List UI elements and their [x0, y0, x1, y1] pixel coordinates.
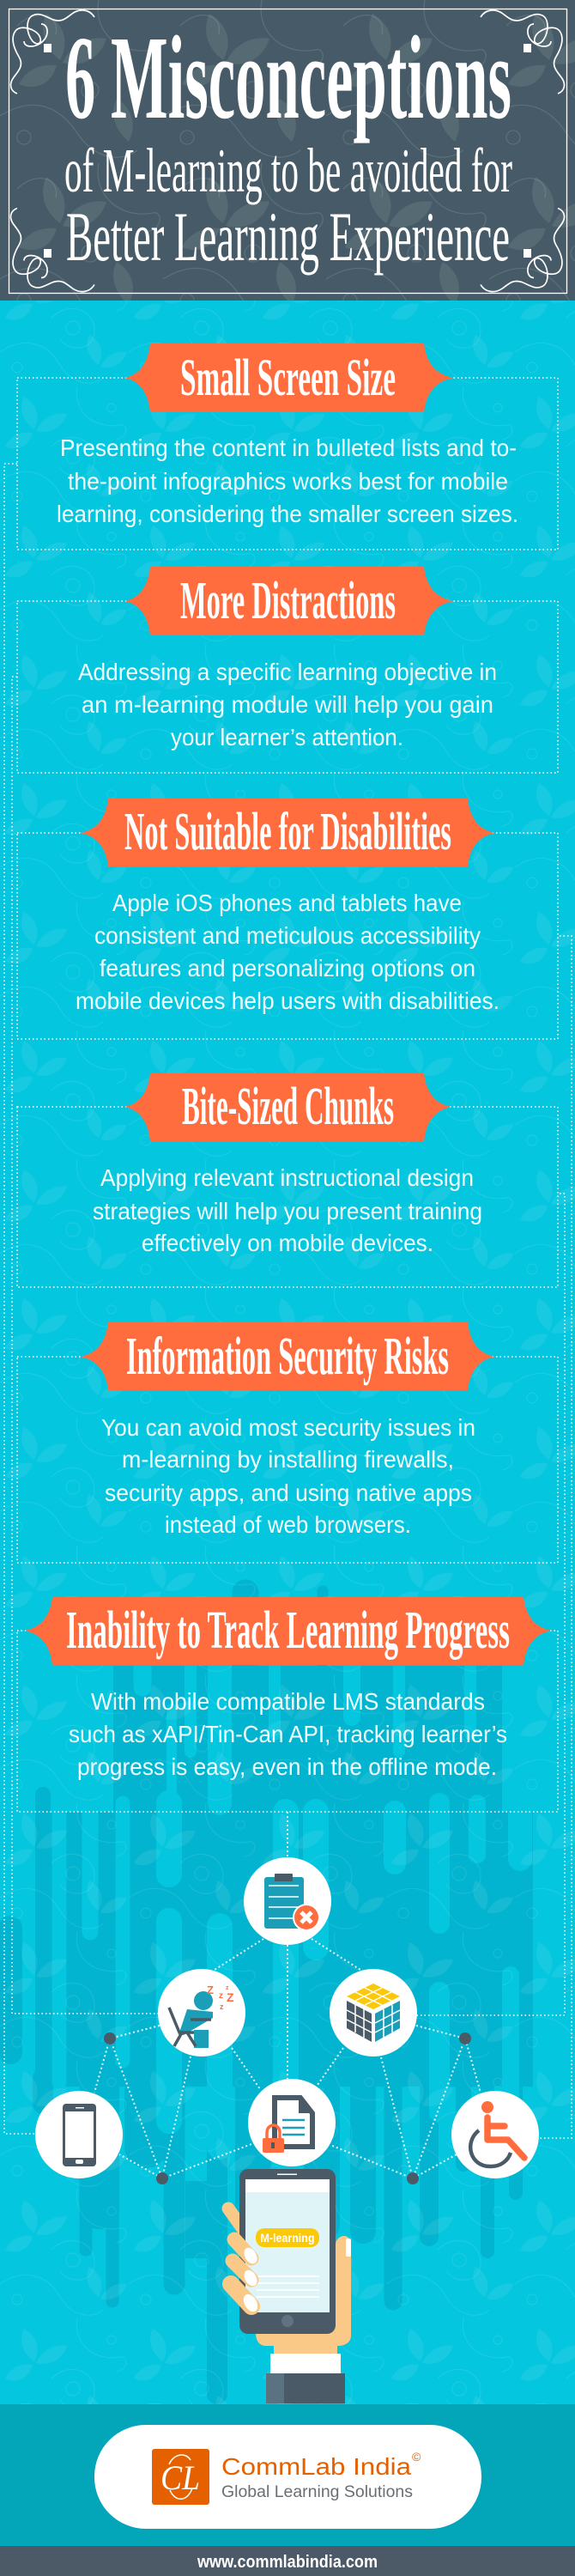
fingers	[231, 2239, 261, 2314]
footer URL bar: www.commlabindia.com	[197, 2553, 378, 2572]
footer URL bar	[0, 2546, 575, 2576]
icon: sleeping learner: z	[219, 1991, 223, 2001]
text: inability to track learning progress: With mobile compatible LMS standards	[91, 1688, 485, 1715]
hand and sleeve	[228, 2208, 351, 2403]
text: bite-sized chunks: effectively on mobile devices.	[142, 1230, 433, 1256]
icon: wheelchair user	[451, 2091, 539, 2178]
icon: CL logo	[152, 2449, 209, 2505]
banner: small screen size: Small Screen Size	[180, 349, 396, 407]
text: more distractions: your learner’s attention.	[171, 724, 403, 750]
text: not suitable for disabilities: mobile devices help users with disabilities.	[76, 987, 499, 1014]
panel: more distractions	[17, 567, 558, 773]
icon: smartphone	[35, 2091, 123, 2178]
text: information security risks	[101, 1414, 475, 1538]
illustration: hand holding phone	[228, 2169, 351, 2403]
icon: sleeping learner: Z	[227, 1990, 234, 2004]
text: inability to track learning progress: progress is easy, even in the offline mode.	[77, 1753, 497, 1780]
label: M-learning	[256, 2228, 319, 2247]
icon: sleeping learner	[158, 1969, 245, 2057]
text: not suitable for disabilities: consistent and meticulous accessibility	[94, 922, 481, 949]
text: inability to track learning progress	[69, 1688, 507, 1780]
logo pill	[94, 2425, 481, 2529]
text: inability to track learning progress: such as xAPI/Tin-Can API, tracking learner’s	[69, 1721, 507, 1747]
text: not suitable for disabilities	[76, 890, 499, 1014]
connector lines	[94, 1812, 481, 2184]
text: information security risks: instead of web browsers.	[165, 1511, 411, 1538]
text: not suitable for disabilities: features and personalizing options on	[100, 955, 475, 981]
text: information security risks: security apps, and using native apps	[105, 1479, 472, 1506]
tagline: Global Learning Solutions	[221, 2483, 413, 2501]
text: small screen size: the-point infographics works best for mobile	[68, 468, 508, 495]
text: more distractions: Addressing a specific learning objective in	[78, 659, 497, 685]
footer band	[0, 2404, 575, 2546]
banner: bite-sized chunks	[124, 1073, 451, 1141]
text: not suitable for disabilities: Apple iOS phones and tablets have	[112, 890, 462, 916]
title	[64, 12, 512, 276]
corner ornaments	[11, 10, 564, 292]
panel: small screen size	[17, 343, 558, 550]
icon network	[35, 1812, 539, 2184]
copyright mark: ©	[412, 2450, 421, 2464]
panel: inability to track learning progress	[17, 1597, 558, 1812]
icon: sleeping learner: Z	[207, 1984, 214, 1996]
text: small screen size: Presenting the content in bulleted lists and to-	[60, 434, 517, 461]
panel: information security risks	[17, 1322, 558, 1563]
icon: CL logo: CL	[160, 2458, 200, 2497]
text: information security risks: m-learning by installing firewalls,	[122, 1446, 454, 1473]
icon: document with padlock	[248, 2079, 336, 2166]
icon: puzzle cube	[330, 1969, 417, 2057]
panel: bite-sized chunks	[17, 1073, 558, 1287]
drip mass	[113, 1666, 502, 1829]
text: bite-sized chunks	[93, 1164, 482, 1256]
text: bite-sized chunks: strategies will help you present training	[93, 1198, 482, 1224]
text: small screen size: learning, considering the smaller screen sizes.	[57, 501, 518, 527]
text: information security risks: You can avoid most security issues in	[101, 1414, 475, 1441]
text: more distractions	[78, 659, 497, 750]
label: M-learning: M-learning	[261, 2232, 314, 2245]
dotted outer rails	[4, 464, 572, 2138]
header panel	[0, 0, 575, 301]
brand name: CommLab India	[221, 2453, 411, 2480]
panel: not suitable for disabilities	[17, 799, 558, 1039]
banner: small screen size	[124, 343, 454, 412]
banner: information security risks	[80, 1322, 495, 1390]
text: more distractions: an m-learning module will help you gain	[82, 691, 493, 718]
phone	[239, 2169, 336, 2334]
icon: sleeping learner: z	[226, 1985, 229, 1991]
banner: more distractions	[124, 567, 454, 635]
light columns cut into the drip mass	[24, 1657, 520, 2147]
text: small screen size	[57, 434, 518, 527]
icon: clipboard with cross	[244, 1857, 331, 1945]
banner: not suitable for disabilities	[80, 799, 495, 866]
text: bite-sized chunks: Applying relevant instructional design	[100, 1164, 474, 1191]
icon: sleeping learner: z	[220, 2002, 224, 2011]
